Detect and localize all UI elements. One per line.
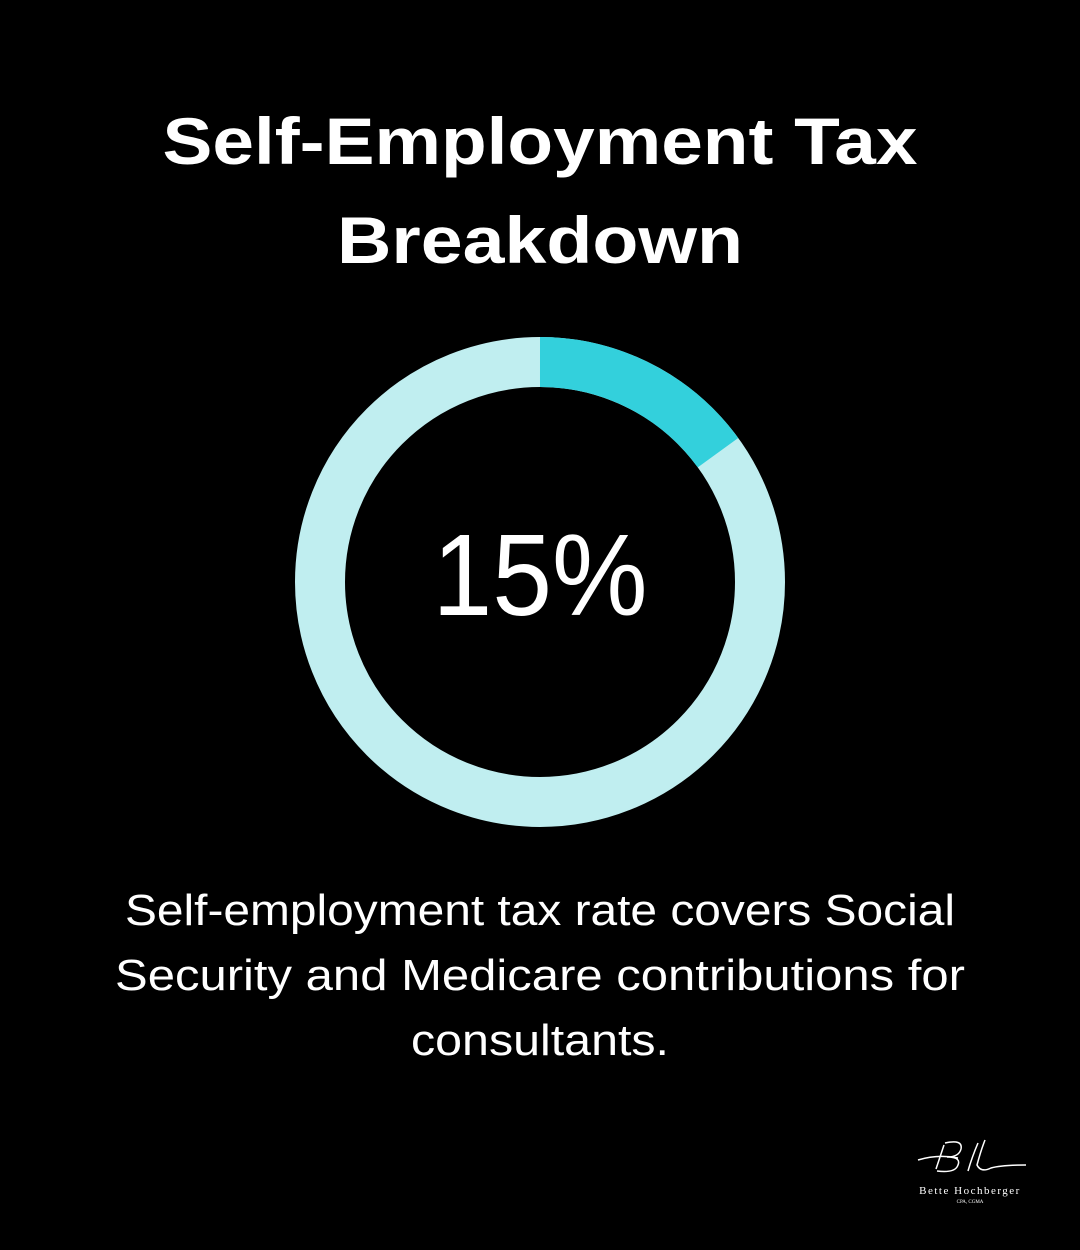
description text: Security and Medicare contributions for: [115, 951, 965, 1000]
logo: CPA, CGMA: [957, 1200, 984, 1205]
description text: Self-employment tax rate covers Social: [125, 886, 955, 935]
logo: Bette Hochberger: [919, 1185, 1021, 1197]
title: Self-Employment Tax: [162, 104, 918, 178]
donut chart: [320, 362, 760, 802]
logo: [918, 1140, 1026, 1205]
title: [162, 104, 918, 277]
percentage label: 15%: [432, 510, 648, 640]
title: Breakdown: [337, 203, 743, 277]
description text: consultants.: [411, 1016, 669, 1065]
description text: [115, 886, 965, 1065]
